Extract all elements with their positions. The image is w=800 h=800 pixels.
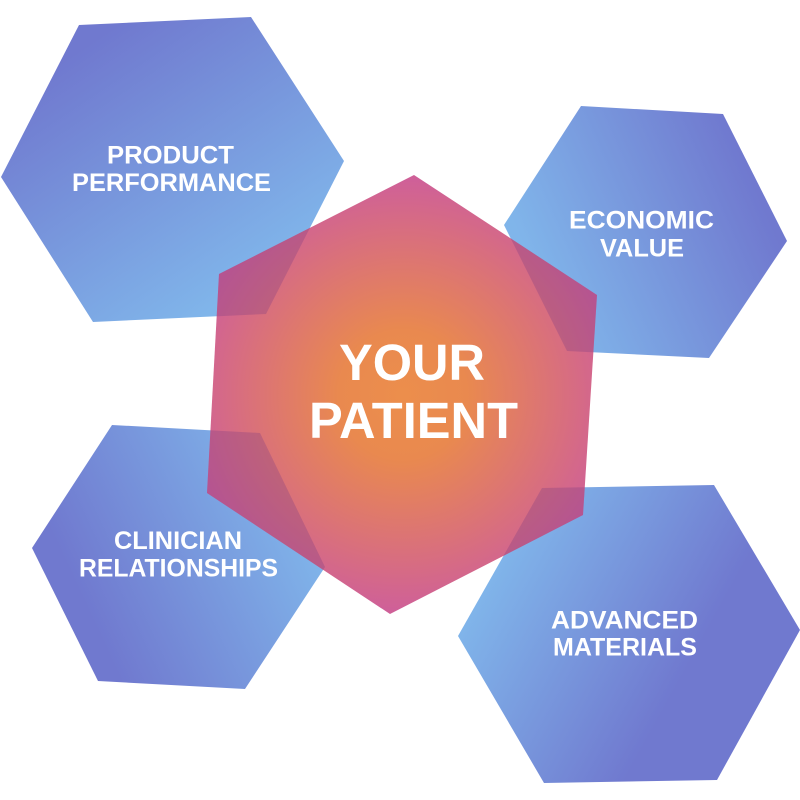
label: your patient: [309, 334, 518, 449]
hexagon: advanced materials: [458, 485, 800, 783]
hexagon: product performance: [1, 17, 344, 322]
label: advanced materials: [551, 606, 698, 662]
label: clinician relationships: RELATIONSHIPS: [79, 554, 278, 582]
label: product performance: [72, 142, 271, 197]
label: clinician relationships: CLINICIAN: [114, 527, 242, 555]
label: your patient: PATIENT: [309, 392, 518, 449]
label: product performance: PERFORMANCE: [72, 169, 271, 197]
label: your patient: YOUR: [339, 334, 485, 391]
label: economic value: VALUE: [600, 234, 684, 262]
label: advanced materials: MATERIALS: [553, 634, 697, 662]
label: economic value: ECONOMIC: [569, 206, 714, 234]
label: product performance: PRODUCT: [107, 142, 234, 170]
hexagon: economic value: [504, 106, 787, 358]
label: advanced materials: ADVANCED: [551, 606, 698, 634]
hexagon: your patient: [207, 175, 597, 614]
label: economic value: [569, 206, 714, 262]
overlap regions: [207, 228, 597, 570]
label: clinician relationships: [79, 527, 278, 582]
hexagon: clinician relationships: [32, 425, 325, 689]
